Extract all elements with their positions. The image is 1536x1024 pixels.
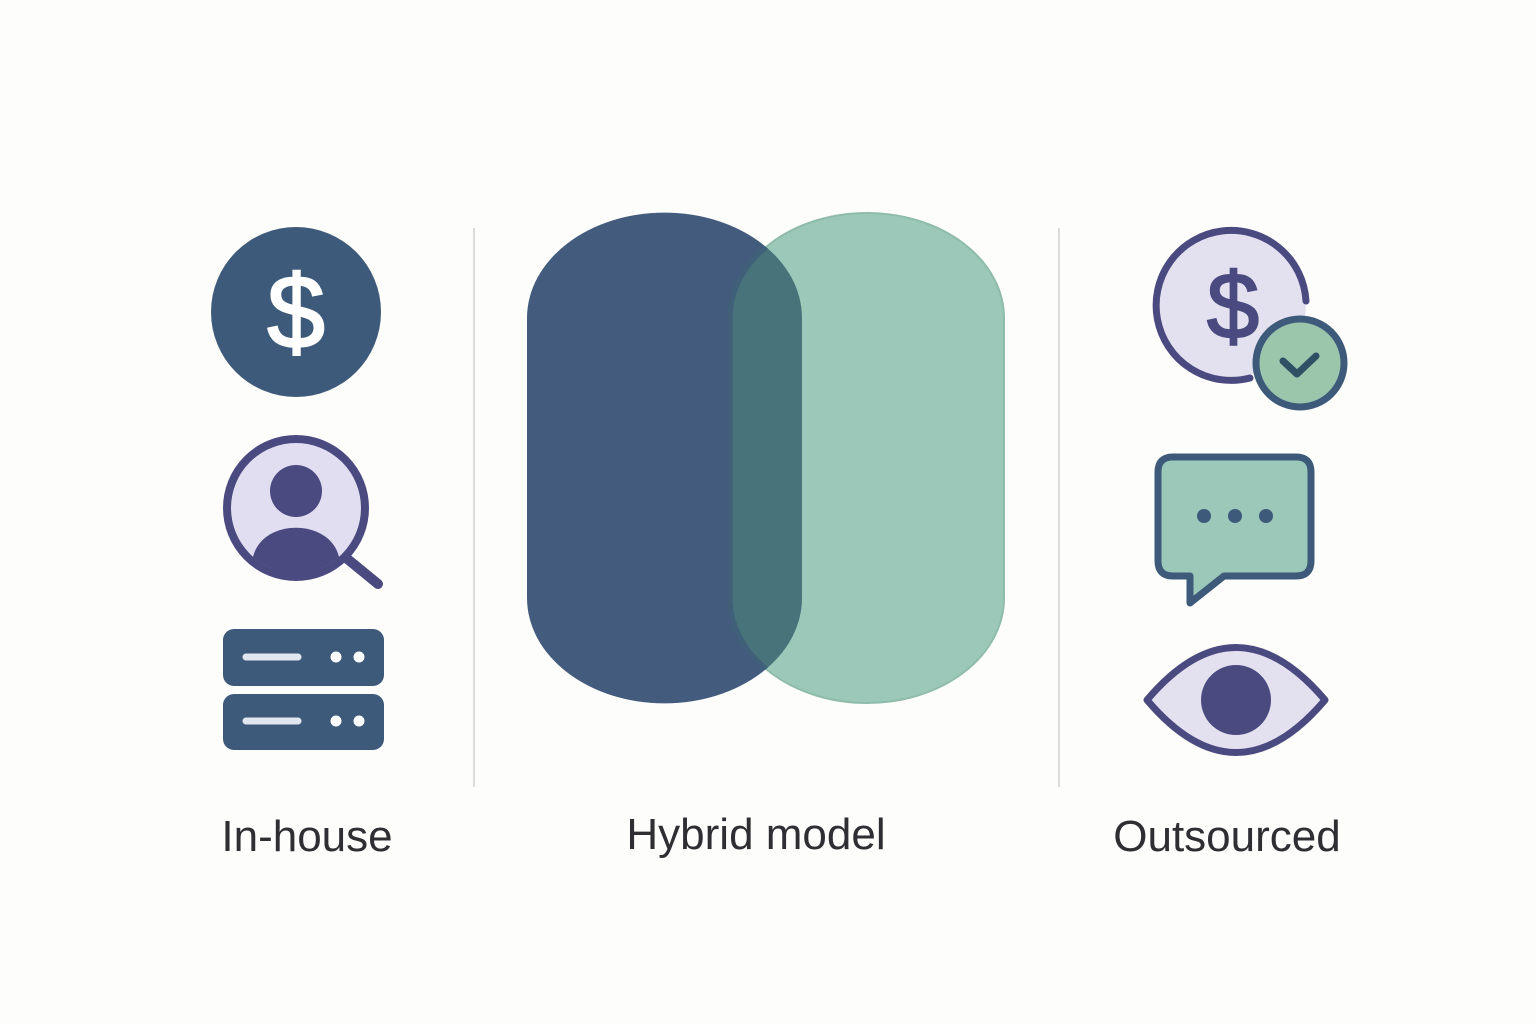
panel: hybrid model xyxy=(527,213,1004,859)
icon: chat bubble xyxy=(1158,457,1311,603)
shape: overlap xyxy=(729,246,802,670)
label: outsourced: Outsourced xyxy=(1113,812,1341,861)
shape: in-house pill xyxy=(527,213,802,703)
icon: eye xyxy=(1147,648,1325,752)
icon: dollar coin with check xyxy=(1156,229,1344,407)
icon: person search xyxy=(227,439,378,584)
panel: in-house xyxy=(211,227,393,861)
icon: servers xyxy=(223,629,384,750)
label: in-house: In-house xyxy=(221,812,393,861)
panel: outsourced xyxy=(1113,229,1344,861)
icon: dollar coin filled: $ xyxy=(267,255,325,371)
icon: dollar coin with check: $ xyxy=(1207,253,1259,358)
shape: outsourced pill xyxy=(730,213,1004,703)
label: hybrid model: Hybrid model xyxy=(626,810,886,859)
icon: dollar coin filled xyxy=(211,227,381,397)
